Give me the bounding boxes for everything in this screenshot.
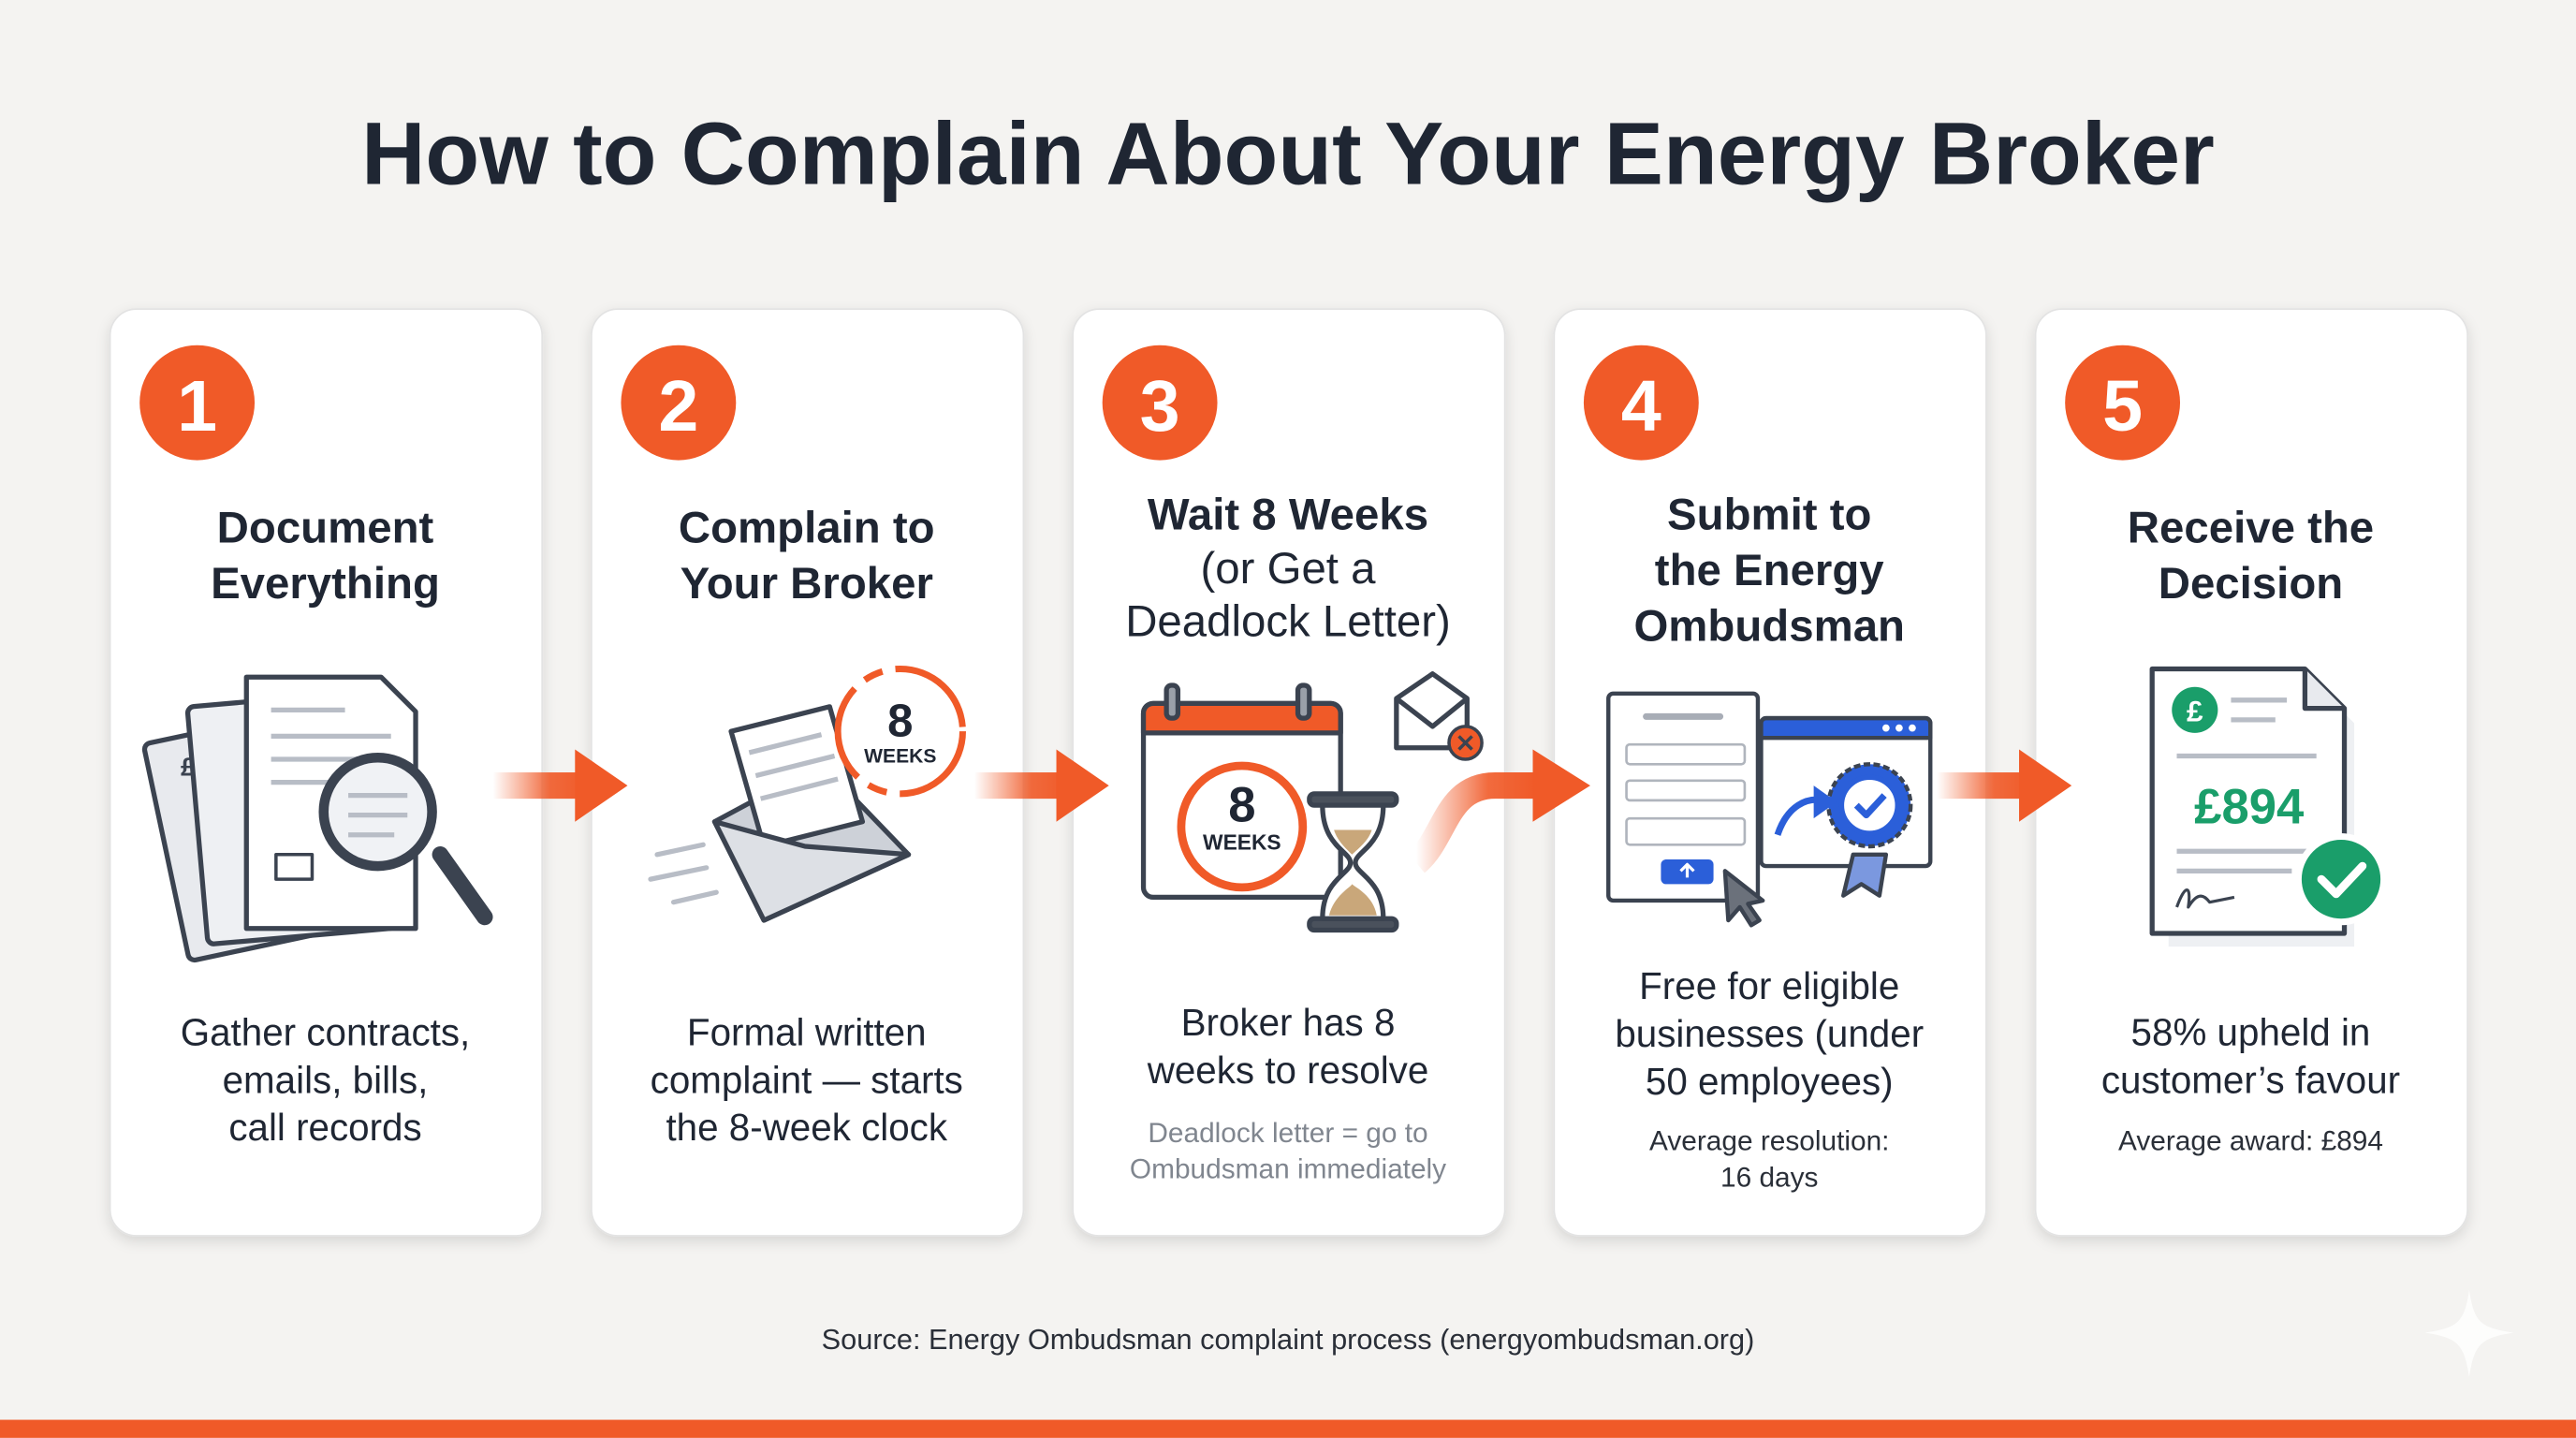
step number 4 [1584,345,1699,461]
description 2: Formal written [687,1010,927,1053]
heading 2: Complain to [679,503,935,552]
description 4: Free for eligible [1639,964,1899,1007]
icon: documents with magnifier [143,677,485,961]
bottom bar [0,1420,2576,1438]
step number 3: 3 [1140,366,1180,447]
icon: decision document [2152,668,2384,946]
icon: decision document: £ [2187,695,2203,728]
description 5: 58% upheld in [2131,1010,2370,1053]
step number 4: 4 [1621,366,1661,447]
decorative sparkle [2425,1290,2513,1377]
icon: online form and badge [1608,694,1930,925]
panel: step 3 [1073,309,1505,1236]
arrow 1 [493,749,627,822]
heading 3: Deadlock Letter) [1125,596,1451,646]
description 3: weeks to resolve [1147,1049,1428,1092]
heading 5: Receive the [2128,503,2374,552]
heading 3: Wait 8 Weeks [1148,490,1428,539]
icon: calendar hourglass deadlock letter [1144,674,1482,931]
description 4: businesses (under [1615,1012,1924,1055]
description 1: Gather contracts, [181,1010,470,1053]
heading 4: the Energy [1655,546,1884,595]
panel: step 1 [110,309,542,1236]
icon: envelope with 8 weeks clock: WEEKS [864,746,936,768]
step number 3 [1103,345,1218,461]
note 3: Ombudsman immediately [1130,1154,1446,1185]
heading 4: Ombudsman [1633,602,1905,652]
step number 5 [2065,345,2180,461]
source note: Source: Energy Ombudsman complaint process (energyombudsman.org) [822,1323,1754,1356]
panel: step 5 [2036,309,2467,1236]
icon: envelope with 8 weeks clock [651,668,962,920]
step number 1: 1 [177,366,217,447]
note 4: Average resolution: [1649,1126,1889,1157]
heading 4: Submit to [1667,490,1871,539]
icon: decision document: £894 [2194,779,2304,834]
step number 2: 2 [658,366,698,447]
description 2: complaint — starts [651,1058,963,1101]
step number 5: 5 [2102,366,2143,447]
note 3: Deadlock letter = go to [1148,1118,1428,1149]
description 1: call records [228,1106,422,1149]
note 5: Average award: £894 [2118,1126,2383,1157]
heading 1: Document [217,503,434,552]
arrow 2 [974,749,1109,822]
step number 2 [621,345,736,461]
title: How to Complain About Your Energy Broker [361,105,2215,204]
description 5: customer’s favour [2101,1058,2400,1101]
icon: documents with magnifier: £ [181,753,196,782]
heading 2: Your Broker [681,559,933,609]
arrow 4 [1937,749,2071,822]
description 4: 50 employees) [1646,1060,1894,1103]
icon: calendar hourglass deadlock letter: 8 [1228,778,1255,833]
panel: step 4 [1554,309,1986,1236]
icon: calendar hourglass deadlock letter: WEEKS [1203,830,1281,855]
panel: step 2 [592,309,1023,1236]
arrow 3 [1416,749,1590,863]
heading 3: (or Get a [1201,544,1376,594]
icon: envelope with 8 weeks clock: 8 [887,696,913,746]
step number 1 [139,345,255,461]
note 4: 16 days [1720,1162,1818,1193]
heading 1: Everything [211,559,440,609]
description 1: emails, bills, [223,1058,428,1101]
description 2: the 8-week clock [666,1106,948,1149]
heading 5: Decision [2159,559,2343,609]
description 3: Broker has 8 [1181,1001,1395,1044]
